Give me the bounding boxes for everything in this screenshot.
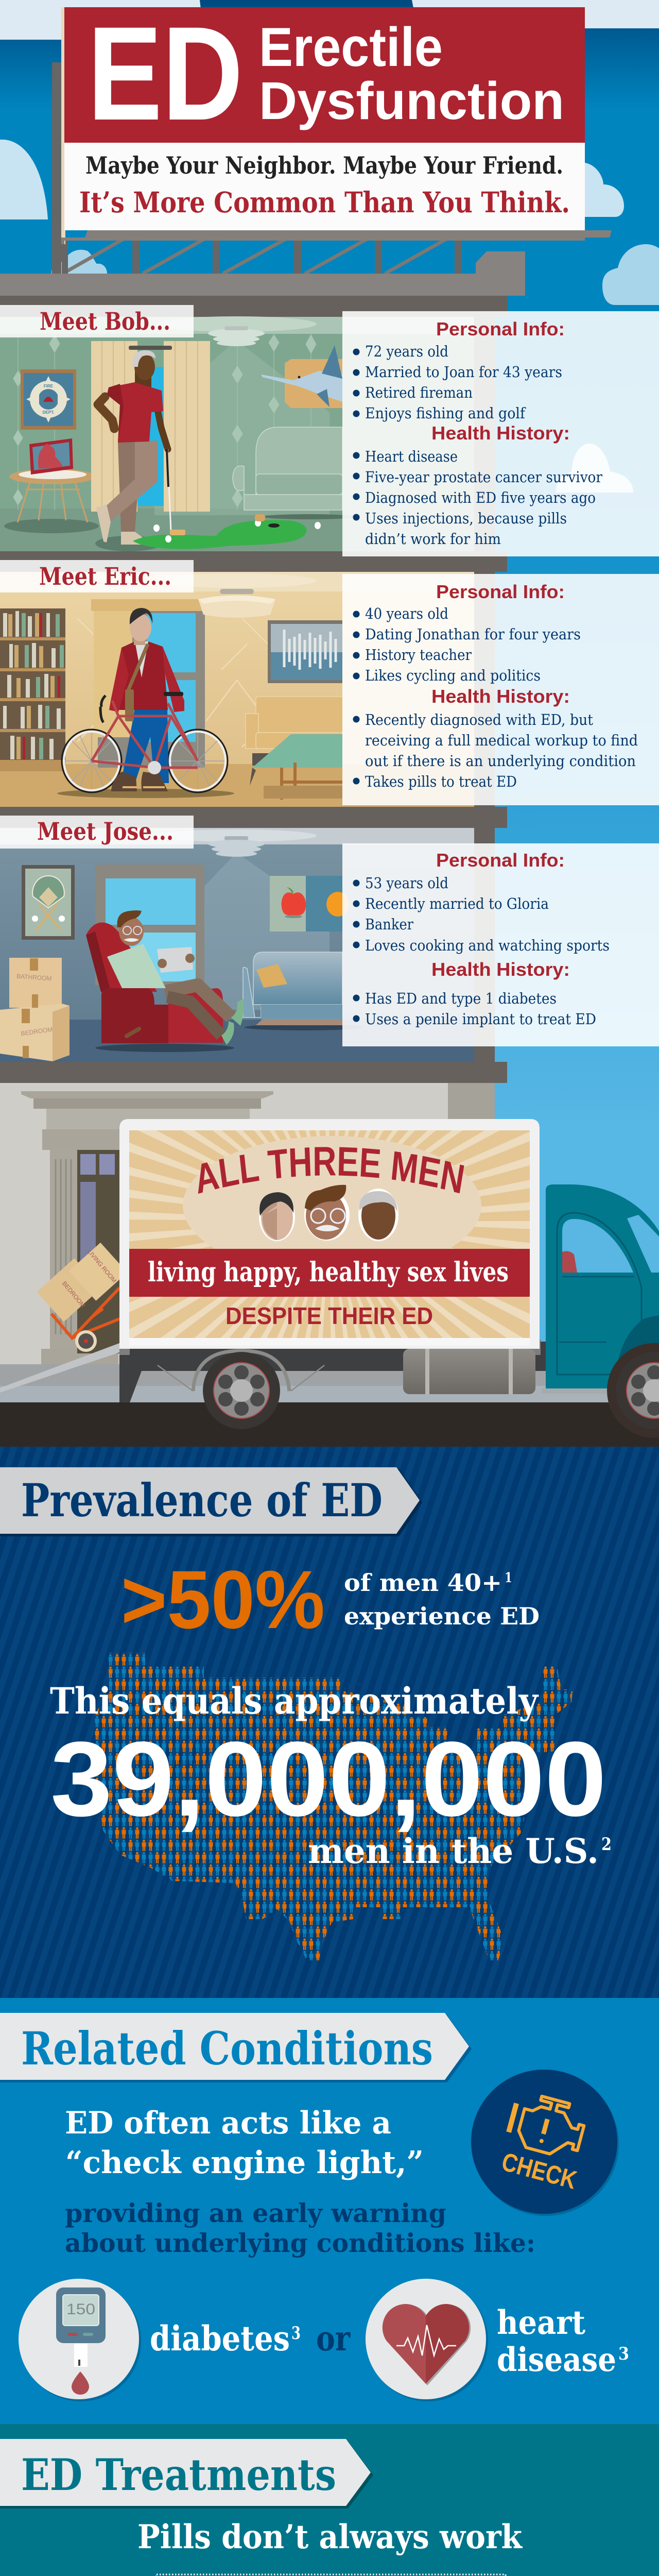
bookshelf [0, 608, 65, 771]
hand truck with boxes [0, 1243, 127, 1393]
list: Jose personal info: Banker [365, 916, 413, 933]
text: diabetes: 3 [291, 2323, 301, 2344]
window [95, 865, 204, 985]
rear wheel [203, 1352, 280, 1429]
wallpaper lines [77, 618, 268, 747]
building walls and floor slabs [0, 251, 525, 1084]
list: Jose health history: Has ED and type 1 diabetes [365, 990, 557, 1007]
text: of men 40+: experience ED [344, 1602, 540, 1630]
list: Eric health history: receiving a full medical workup to find [365, 732, 638, 749]
heading: health history: Health History: [431, 422, 570, 444]
despite their ED: DESPITE THEIR ED [226, 1302, 433, 1329]
heading: personal info: Personal Info: [436, 850, 565, 871]
baseball picture [22, 865, 75, 940]
red banner: living happy, healthy sex lives [148, 1257, 509, 1288]
truck box [119, 1119, 540, 1349]
list: Bob health history: Uses injections, because pills [365, 510, 567, 527]
text: or: or [316, 2318, 351, 2359]
hand truck with boxes: BEDROOM [61, 1280, 86, 1309]
front wheel [607, 1343, 659, 1438]
list: Eric health history: Takes pills to treat ED [365, 773, 517, 790]
coffee table [250, 734, 342, 800]
heading banner: treatments [0, 2439, 373, 2509]
text: heart disease: heart [497, 2303, 585, 2342]
list: Bob personal info: Married to Joan for 43 years [365, 363, 562, 381]
list: Eric personal info: Likes cycling and politics [365, 667, 541, 684]
text: this equals approximately: This equals approximately [50, 1680, 539, 1722]
heading banner: related conditions: Related Conditions [21, 2022, 433, 2075]
list: Jose personal info [353, 874, 610, 954]
text: providing early warning: providing an early warning [65, 2198, 446, 2228]
list: Bob personal info: Retired fireman [365, 384, 473, 401]
window and blind [91, 599, 209, 768]
list: Jose personal info: 53 years old [365, 874, 448, 892]
sofa with cushion [243, 952, 363, 1030]
title: ED: ED [88, 0, 243, 148]
text: ED often acts like: ED often acts like a [65, 2105, 391, 2141]
curtains and window [91, 341, 210, 512]
lamp [208, 836, 265, 857]
text: of men 40+ [344, 1569, 540, 1630]
list: Eric personal info: 40 years old [365, 605, 448, 622]
icon: heart with pulse [366, 2279, 488, 2401]
moving truck [119, 1119, 659, 1438]
truck cab [542, 1184, 659, 1394]
info panel: Bob [342, 311, 659, 556]
heading banner: prevalence: Prevalence of ED [21, 1473, 383, 1527]
heading banner: treatments: ED Treatments [21, 2449, 336, 2500]
heading: personal info: Personal Info: [436, 318, 565, 340]
fire department picture: DEPT. [43, 410, 54, 415]
list: Eric health history [353, 711, 638, 790]
subtitle: more common: It’s More Common Than You Think. [79, 185, 570, 219]
marlin [261, 345, 342, 408]
billboard post and truss [52, 62, 462, 274]
list: Eric health history: out if there is an underlying condition [365, 752, 636, 770]
list: Bob health history: Five-year prostate cancer survivor [365, 468, 602, 486]
room: Jose [0, 828, 474, 1062]
Bob figure [95, 350, 185, 551]
wallpaper strings [13, 334, 316, 510]
red banner [129, 1249, 530, 1297]
icon: check engine light: CHECK [499, 2147, 580, 2195]
fire department picture [21, 369, 76, 430]
heading: health history: Health History: [431, 959, 570, 980]
text: of men 40+: of men 40+ [344, 1569, 502, 1597]
hand truck with boxes: LIVING ROOM [86, 1248, 118, 1284]
stat: greater than 50 percent: >50% [121, 1553, 325, 1646]
section: prevalence of ED [0, 1447, 659, 1998]
text: diabetes: diabetes [150, 2318, 290, 2359]
moving boxes: BEDROOM [21, 1026, 53, 1037]
room: Bob [0, 316, 474, 551]
icon: glucose meter [19, 2279, 141, 2401]
label: Meet Eric: Meet Eric... [39, 563, 171, 591]
list: Bob health history [353, 448, 602, 548]
heading banner: prevalence [0, 1467, 422, 1536]
text: men in the U.S.: 2 [601, 1834, 612, 1855]
list: Eric personal info: Dating Jonathan for four years [365, 625, 581, 643]
label: Meet Eric [0, 560, 194, 592]
list: Bob personal info [353, 343, 562, 422]
text: check engine light: “check engine light,” [65, 2145, 424, 2181]
heading banner: related conditions [0, 2013, 472, 2082]
sidewalk and street [0, 1342, 659, 1447]
label: Meet Bob: Meet Bob... [40, 308, 170, 336]
heading: health history: Health History: [431, 686, 570, 707]
icon: glucose meter: 150 [66, 2301, 95, 2318]
title: Erectile: Erectile [259, 16, 443, 78]
label: Meet Jose: Meet Jose... [37, 818, 174, 846]
room: Eric [0, 572, 474, 807]
Jose in recliner [86, 910, 244, 1052]
ground floor facade [0, 1083, 495, 1364]
armchair [233, 427, 355, 521]
subtitle: neighbor and friend: Maybe Your Neighbor. Maybe Your Friend. [85, 151, 563, 179]
info panel: Jose [342, 843, 659, 1046]
list: Eric personal info: History teacher [365, 646, 472, 664]
list: Eric personal info [353, 605, 581, 684]
list: Bob health history: Diagnosed with ED five years ago [365, 489, 596, 506]
fire department picture: FIRE [44, 384, 54, 388]
ceiling lamp [198, 589, 275, 618]
wave art [268, 620, 342, 683]
US map of people [92, 1653, 573, 1960]
list: Jose health history [353, 990, 596, 1028]
label: Meet Jose [0, 816, 194, 849]
label: Meet Bob [0, 305, 194, 337]
text: pills don't always work: Pills don’t always work [137, 2518, 523, 2556]
moving boxes [0, 958, 70, 1061]
section: ED treatments [0, 2424, 659, 2576]
list: Bob health history: didn’t work for him [365, 530, 501, 548]
list: Jose personal info: Recently married to Gloria [365, 895, 549, 912]
fuel tank [403, 1349, 535, 1394]
icon: check engine light [471, 2070, 619, 2216]
list: Bob health history: Heart disease [365, 448, 458, 465]
truck chassis [119, 1340, 547, 1402]
heading: personal info: Personal Info: [436, 581, 565, 602]
banner: all three men: ALL THREE MEN [198, 1147, 464, 1194]
text: men in the U.S.: men in the U.S. [308, 1831, 599, 1871]
section: related conditions [0, 1998, 659, 2424]
list: Eric health history: Recently diagnosed with ED, but [365, 711, 593, 728]
side table with photo [4, 438, 99, 533]
title: Dysfunction: Dysfunction [259, 71, 564, 130]
faces [259, 1185, 398, 1241]
text: heart disease: disease [497, 2341, 616, 2379]
putting green [133, 519, 321, 549]
sofa [246, 697, 343, 749]
list: Bob personal info: 72 years old [365, 343, 448, 360]
text: heart disease [497, 2303, 629, 2379]
Eric with bicycle [57, 608, 234, 798]
lamp [208, 326, 265, 346]
list: Jose health history: Uses a penile implant to treat ED [365, 1010, 596, 1028]
info panel: Eric [342, 574, 659, 805]
stat: 39,000,000: 39,000,000 [50, 1720, 606, 1838]
sky background [0, 0, 659, 1370]
list: Bob personal info: Enjoys fishing and golf [365, 404, 526, 422]
dotted connector [156, 2574, 506, 2576]
text: about underlying conditions: about underlying conditions like: [65, 2228, 535, 2258]
list: Jose personal info: Loves cooking and watching sports [365, 937, 610, 954]
text: heart disease: 3 [618, 2344, 629, 2364]
billboard [61, 0, 612, 244]
text: of men 40+: 1 [505, 1570, 512, 1586]
moving boxes: BATHROOM [16, 973, 52, 982]
clouds [0, 0, 659, 493]
fruit art [270, 876, 349, 931]
